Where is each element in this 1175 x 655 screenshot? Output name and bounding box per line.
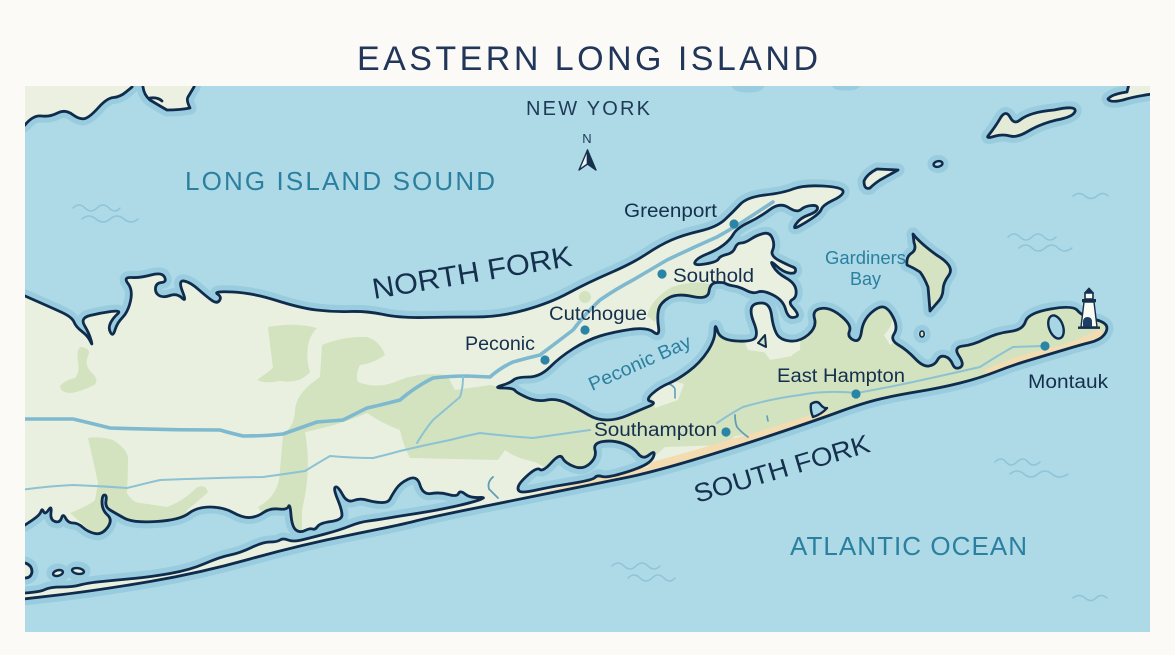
label: Atlantic Ocean: ATLANTIC OCEAN: [790, 531, 1027, 561]
town: Peconic: [465, 334, 550, 365]
town: Greenport: Greenport: [624, 201, 718, 222]
other land: [15, 76, 1160, 578]
town: Montauk: [1028, 341, 1109, 393]
town: Cutchogue: Cutchogue: [549, 304, 647, 325]
town: Southampton: Southampton: [594, 420, 717, 441]
main island land: [25, 187, 842, 598]
cream patches: [650, 314, 898, 408]
town: Greenport: [624, 201, 739, 229]
town: Peconic: Peconic: [465, 334, 535, 355]
roads: [20, 202, 1043, 498]
land cover, sand and roads clipped to the island: [20, 202, 1120, 540]
label: Gardiners Bay: Gardiners: [825, 248, 906, 268]
label: South Fork: SOUTH FORK: [690, 428, 874, 509]
town: Montauk: Montauk: [1028, 372, 1109, 393]
label: New York: NEW YORK: [526, 98, 651, 120]
label: Gardiners Bay: [825, 248, 906, 289]
shallow water halo around coasts: [15, 76, 1160, 600]
compass north arrow: N: [582, 131, 592, 146]
town: Southold: Southold: [673, 266, 754, 287]
town: East Hampton: East Hampton: [777, 366, 905, 387]
wave marks: [73, 194, 1108, 600]
coastlines: [15, 76, 1160, 600]
label: Gardiners Bay: Bay: [850, 269, 881, 289]
beach sand: [519, 329, 1104, 498]
label: Peconic Bay: Peconic Bay: [585, 331, 695, 396]
title: EASTERN LONG ISLAND: [357, 40, 818, 78]
icon: Montauk lighthouse: [1078, 288, 1100, 329]
ponds and islets: [52, 160, 1067, 577]
label: North Fork: NORTH FORK: [370, 241, 575, 306]
water: [25, 86, 1150, 632]
compass north arrow: [579, 131, 596, 170]
town: East Hampton: [777, 366, 905, 399]
town: Cutchogue: [549, 304, 647, 335]
green areas: [60, 283, 1120, 540]
label: Long Island Sound: LONG ISLAND SOUND: [185, 166, 495, 196]
